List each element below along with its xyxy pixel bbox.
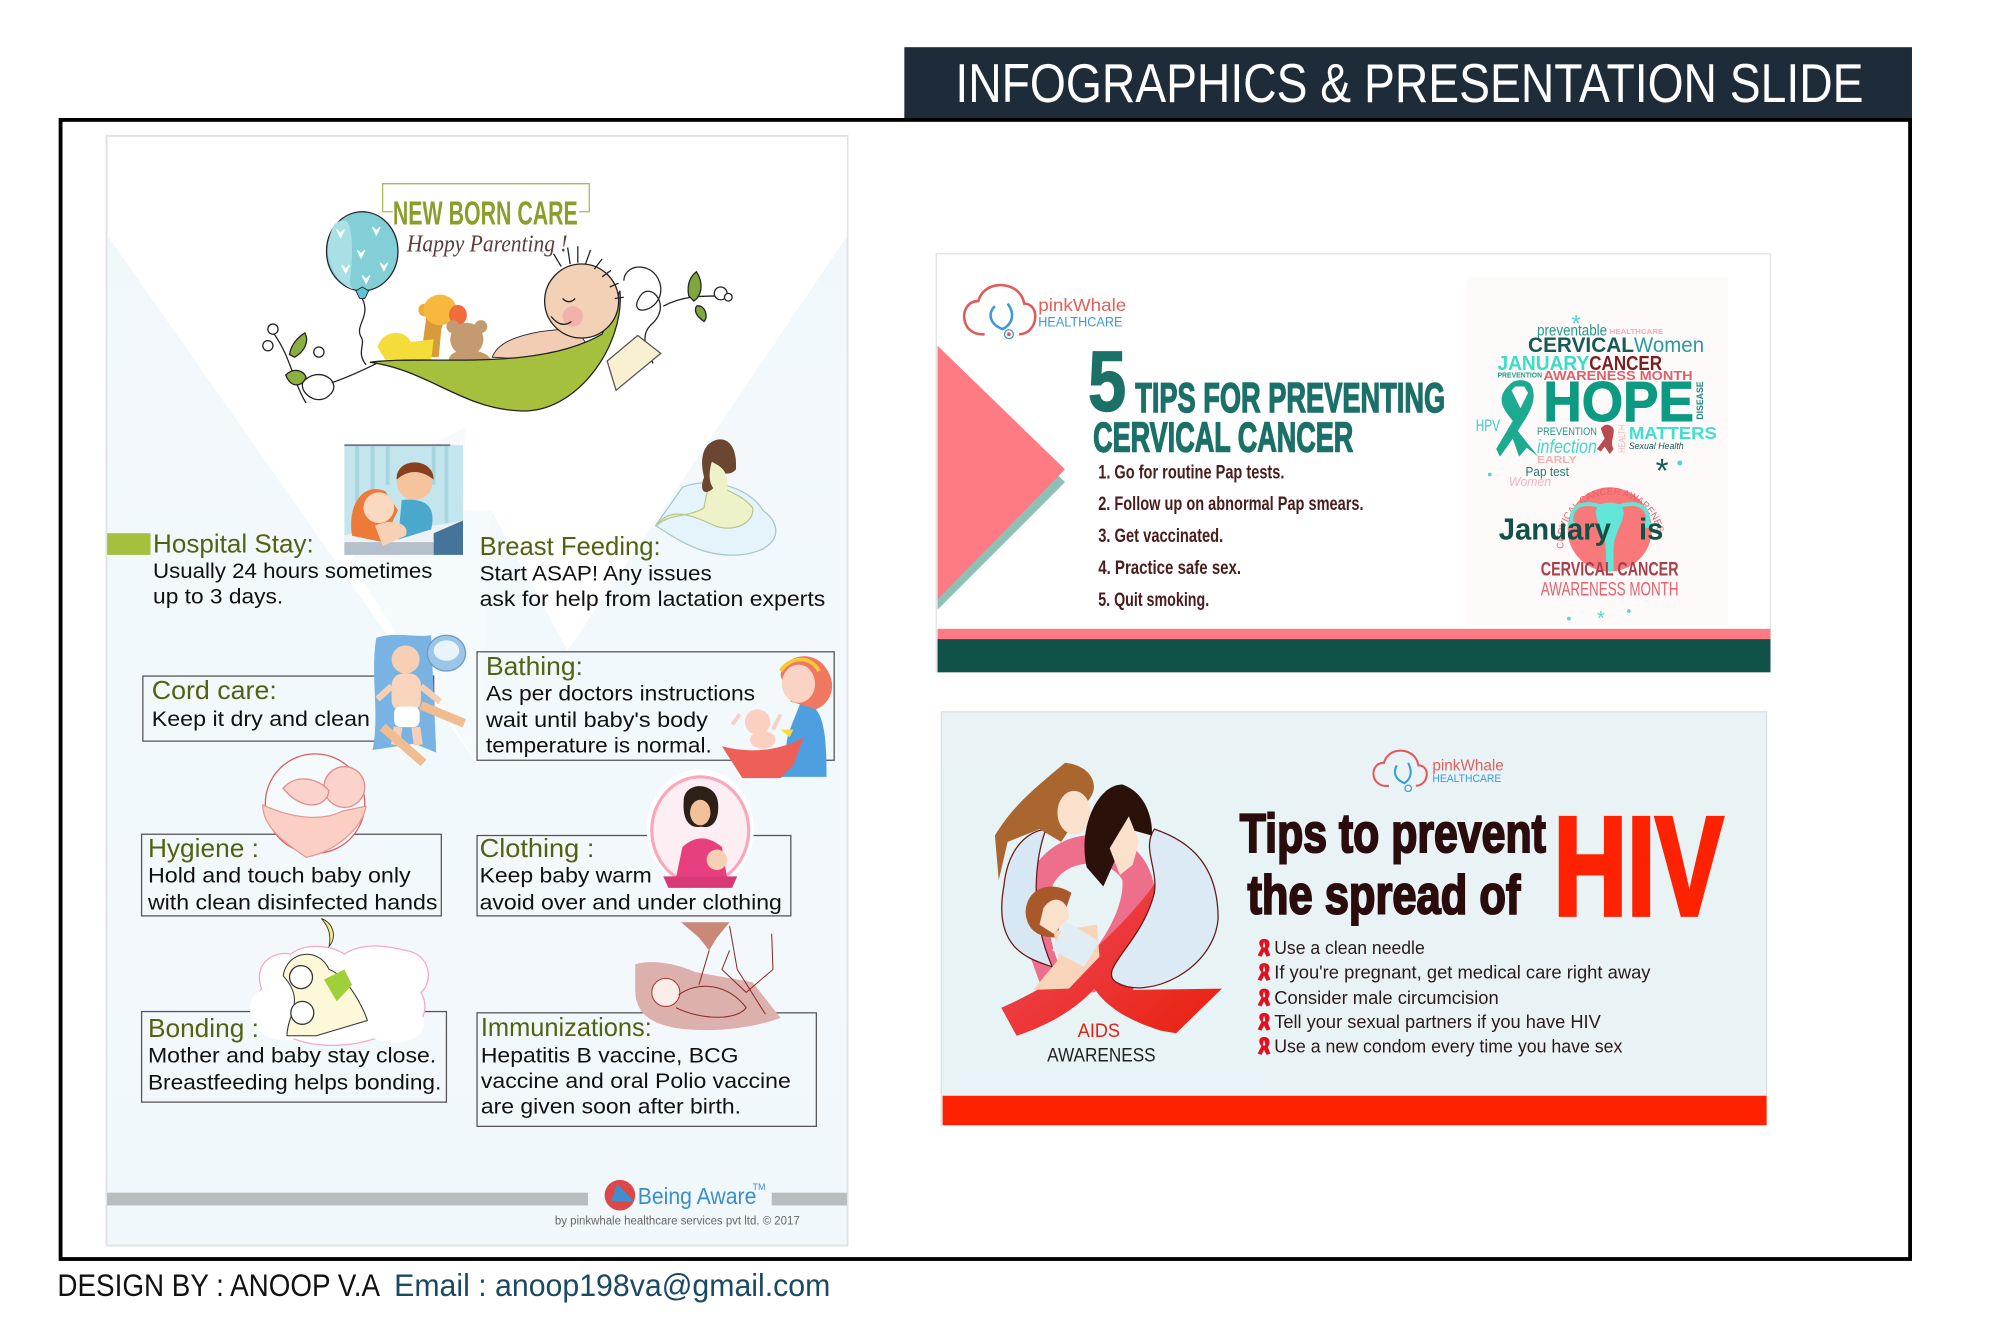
aids awareness label: AIDS <box>1078 1021 1120 1042</box>
word cloud: Women <box>1509 474 1551 489</box>
icon: baby being vaccinated <box>635 922 781 1030</box>
section: bathing <box>477 652 834 778</box>
tips list: Use a clean needle <box>1274 937 1425 958</box>
text: bonding: Breastfeeding helps bonding. <box>148 1069 441 1094</box>
heading: bonding: Bonding : <box>148 1015 259 1043</box>
text: clothing: Keep baby warm <box>480 863 652 888</box>
section: cord care <box>143 635 466 763</box>
slide title: Tips to prevent <box>1240 802 1546 864</box>
icon: mother holding baby <box>647 769 754 889</box>
word cloud: CERVICAL CANCER <box>1541 559 1679 580</box>
word cloud: * <box>1597 608 1605 630</box>
section: bonding <box>142 918 446 1102</box>
tips list: 2. Follow up on abnormal Pap smears. <box>1098 494 1364 515</box>
designer credit: Email : anoop198va@gmail.com <box>394 1267 830 1303</box>
text: immunizations: are given soon after birth. <box>481 1094 741 1119</box>
pinkwhale logo <box>1373 751 1504 792</box>
tips list: If you're pregnant, get medical care right away <box>1274 961 1651 982</box>
word cloud: infection <box>1537 437 1597 458</box>
word cloud: PREVENTION <box>1497 371 1542 380</box>
word cloud: HEALTHCARE <box>1610 327 1663 336</box>
heading: cord care: Cord care: <box>152 677 277 705</box>
word cloud: HOPE <box>1543 370 1694 433</box>
tips list <box>1098 462 1364 611</box>
red bottom band <box>943 1096 1767 1125</box>
text: clothing: avoid over and under clothing <box>480 890 782 915</box>
word cloud: EARLY <box>1537 455 1577 466</box>
decorative pink arrow <box>938 346 1065 610</box>
icon: hospital family <box>344 445 463 555</box>
section: breast feeding <box>480 439 825 611</box>
heading: hospital stay: Hospital Stay: <box>153 530 314 558</box>
tips list: 3. Get vaccinated. <box>1098 526 1223 547</box>
panel: new born care poster <box>107 136 848 1246</box>
heading: bathing: Bathing: <box>486 653 583 681</box>
icon: baby on mat <box>372 635 466 763</box>
text: bonding: Mother and baby stay close. <box>148 1043 436 1068</box>
designer credit <box>57 1267 830 1303</box>
text: hygiene: with clean disinfected hands <box>147 890 438 915</box>
tips list: 4. Practice safe sex. <box>1098 558 1241 579</box>
word cloud: Sexual Health <box>1629 441 1684 451</box>
slide title: 5 <box>1088 335 1126 430</box>
slide title <box>1240 788 1723 945</box>
text: hygiene <box>147 863 438 915</box>
poster footer: Being Aware <box>638 1183 756 1209</box>
pinkwhale logo <box>964 285 1126 339</box>
icon: teal ribbon <box>1496 380 1538 457</box>
illustration: family forming aids ribbon <box>995 763 1222 1036</box>
heading: hygiene: Hygiene : <box>148 835 259 863</box>
slide title: HIV <box>1554 788 1723 945</box>
text: bathing: temperature is normal. <box>486 733 712 758</box>
slide title: TIPS FOR PREVENTING <box>1135 374 1445 421</box>
pinkwhale logo: HEALTHCARE <box>1432 773 1502 785</box>
text: bathing <box>485 680 755 758</box>
heading: clothing: Clothing : <box>480 835 594 863</box>
tips list: 5. Quit smoking. <box>1098 590 1209 611</box>
icon: baby in hand <box>263 754 366 857</box>
word cloud: is <box>1639 513 1663 547</box>
section: hygiene <box>142 754 441 916</box>
text: breast feeding <box>480 560 825 611</box>
word cloud: AWARENESS MONTH <box>1543 368 1693 383</box>
word cloud: CANCER <box>1589 353 1662 375</box>
slide title: CERVICAL CANCER <box>1093 414 1353 461</box>
text: immunizations: vaccine and oral Polio vaccine <box>481 1068 791 1093</box>
slide title: the spread of <box>1247 863 1521 925</box>
designer credit: DESIGN BY : ANOOP V.A <box>57 1267 381 1303</box>
section: hospital stay <box>107 445 463 608</box>
text: hygiene: Hold and touch baby only <box>148 863 411 888</box>
pinkwhale logo: HEALTHCARE <box>1038 314 1122 330</box>
word cloud: AWARENESS MONTH <box>1541 580 1679 601</box>
section: immunizations <box>477 922 816 1126</box>
text: cord care: Keep it dry and clean <box>152 706 370 731</box>
text: clothing <box>480 863 782 915</box>
poster title: NEW BORN CARE <box>393 196 578 233</box>
illustration: baby in pea pod <box>263 212 732 411</box>
poster footer: TM <box>753 1182 765 1192</box>
text: bathing: wait until baby's body <box>485 707 708 732</box>
icon: mother bathing baby <box>722 656 832 778</box>
word cloud: * <box>1571 311 1581 338</box>
tips list: Use a new condom every time you have sex <box>1274 1035 1623 1056</box>
aids awareness label: AWARENESS <box>1047 1045 1156 1066</box>
word cloud: Women <box>1634 332 1704 357</box>
text: breast feeding: ask for help from lactation experts <box>480 586 825 611</box>
panel: hiv tips slide <box>941 712 1767 1125</box>
poster footer <box>107 1180 847 1228</box>
tips list: Tell your sexual partners if you have HIV <box>1274 1011 1601 1032</box>
aids awareness label <box>1047 1021 1156 1066</box>
word cloud: HPV <box>1476 416 1500 435</box>
panel: cervical cancer slide <box>936 253 1771 673</box>
word cloud: preventable <box>1537 322 1607 339</box>
heading: breast feeding: Breast Feeding: <box>480 533 661 561</box>
icon: mother and baby on clouds <box>250 918 428 1045</box>
word cloud <box>1476 311 1717 630</box>
text: hospital stay: up to 3 days. <box>153 583 283 608</box>
pinkwhale logo: pinkWhale <box>1038 295 1126 315</box>
header banner: INFOGRAPHICS & PRESENTATION SLIDE <box>955 52 1864 114</box>
word cloud: PREVENTION <box>1537 426 1597 438</box>
text: bonding <box>148 1043 441 1094</box>
pinkwhale logo: pinkWhale <box>1432 757 1504 774</box>
text: bathing: As per doctors instructions <box>486 680 755 705</box>
word cloud: January <box>1499 513 1611 547</box>
icon: breast feeding mother <box>656 439 776 555</box>
poster footer: by pinkwhale healthcare services pvt ltd. © 2017 <box>555 1214 800 1228</box>
text: immunizations <box>481 1043 791 1119</box>
text: hospital stay: Usually 24 hours sometimes <box>153 558 433 583</box>
icon: uterus <box>1568 503 1652 571</box>
word cloud: HEALTH <box>1617 425 1627 453</box>
word cloud: CERVICAL <box>1528 332 1634 357</box>
word cloud: * <box>1656 453 1669 490</box>
text: breast feeding: Start ASAP! Any issues <box>480 560 712 585</box>
slide title <box>1088 335 1445 461</box>
text: immunizations: Hepatitis B vaccine, BCG <box>481 1043 739 1068</box>
tips list <box>1258 937 1651 1056</box>
word cloud: CERVICAL CANCER AWARENESS MONTH <box>1556 488 1664 548</box>
icon: being aware logo <box>605 1180 635 1211</box>
tips list: 1. Go for routine Pap tests. <box>1098 462 1284 483</box>
heading: immunizations: Immunizations: <box>481 1014 652 1042</box>
word cloud: Pap test <box>1526 464 1569 479</box>
text: hospital stay <box>153 558 433 608</box>
word cloud: MATTERS <box>1629 423 1717 443</box>
poster title: Happy Parenting ! <box>406 230 568 257</box>
word cloud: DISEASE <box>1695 381 1705 420</box>
poster title <box>383 184 589 257</box>
word cloud: JANUARY <box>1497 353 1590 375</box>
tips list: Consider male circumcision <box>1274 987 1499 1008</box>
bottom bands <box>938 629 1770 672</box>
section: clothing <box>477 769 791 916</box>
outer frame <box>61 120 1910 1259</box>
